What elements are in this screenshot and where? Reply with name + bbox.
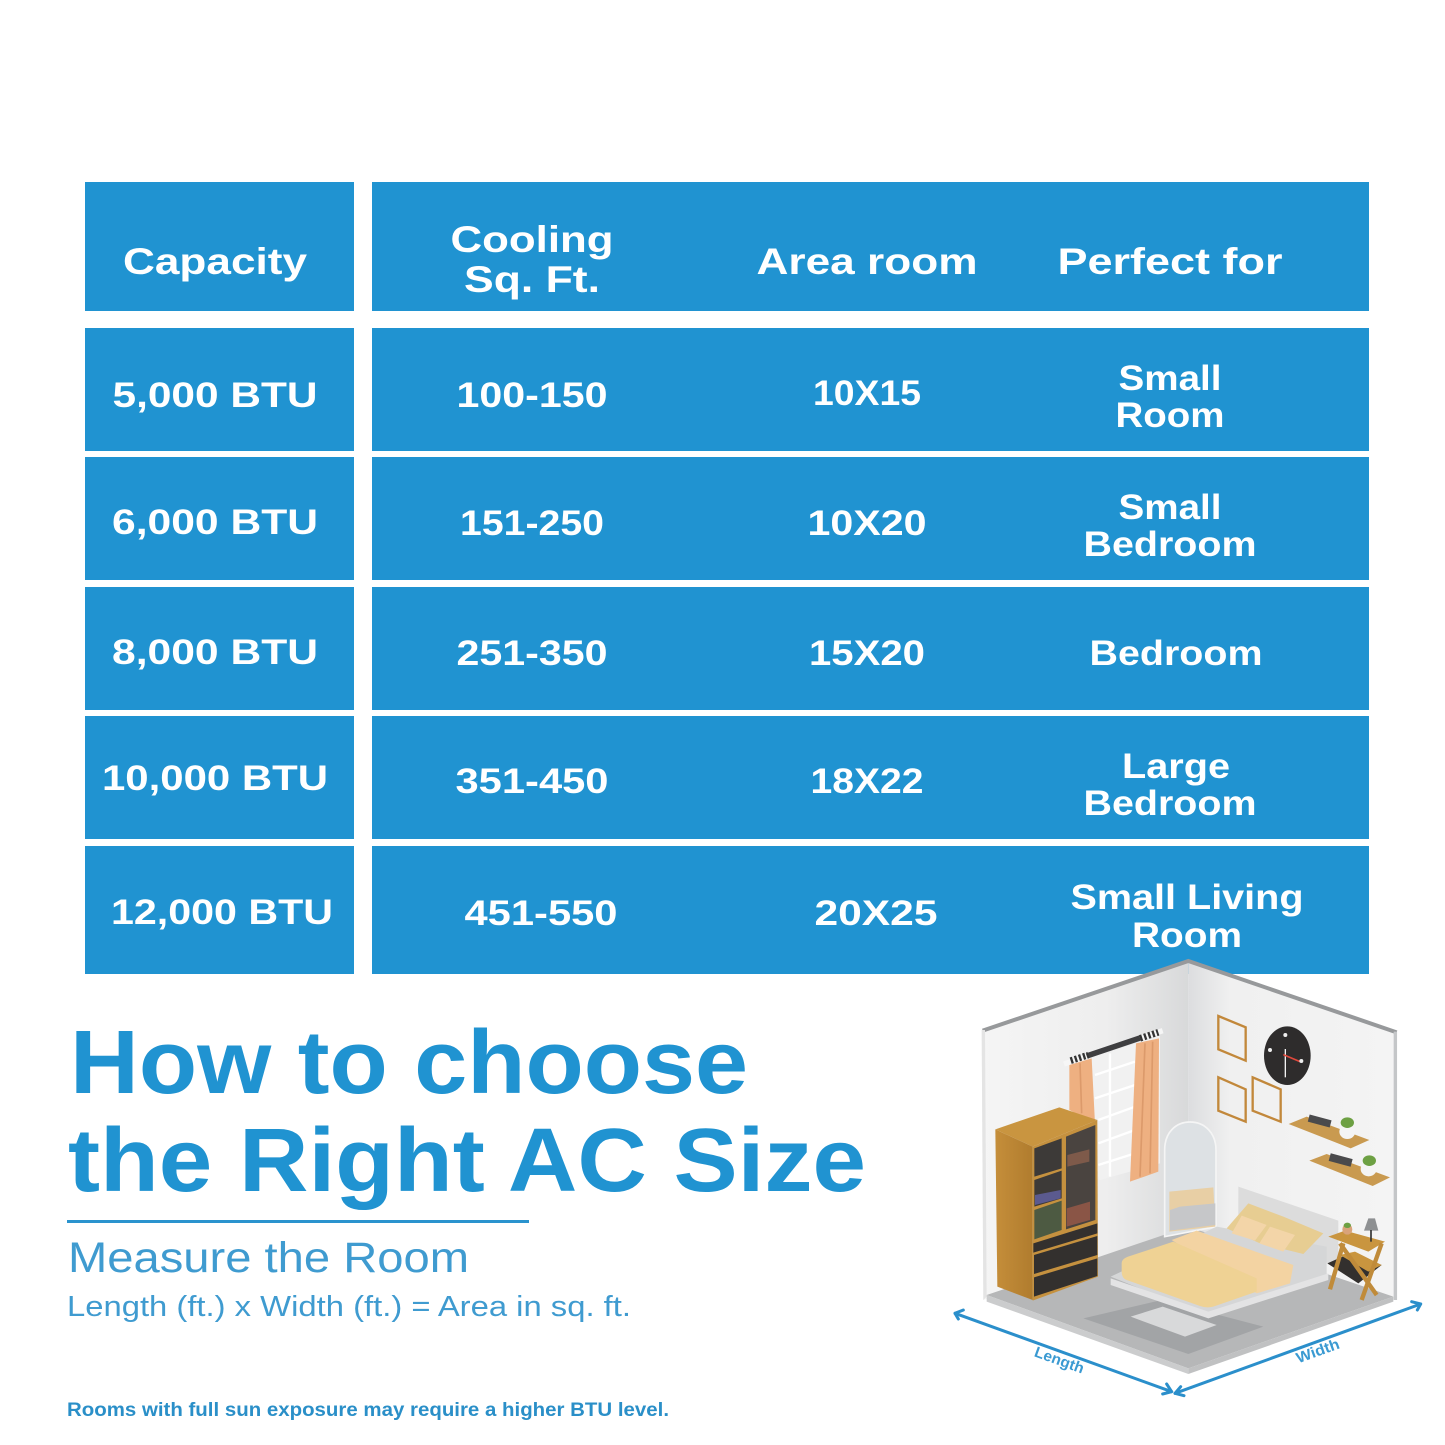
row: 6,000 BTU: 10X20 [808,504,926,543]
row: 10,000 BTU: Bedroom [1084,784,1256,823]
row: 8,000 BTU: Bedroom [1090,634,1262,673]
title [68,1013,866,1211]
row: 5,000 BTU: Small [1118,359,1222,398]
row: 12,000 BTU: Room [1132,916,1242,955]
table header: cooling, area room, perfect for: Cooling [450,219,614,260]
table header: capacity: Capacity [123,241,308,282]
row: 5,000 BTU: 100-150 [456,376,608,415]
table header: cooling, area room, perfect for [372,182,1369,311]
title: the Right AC Size [68,1111,866,1211]
row: 10,000 BTU [85,716,1369,839]
row: 8,000 BTU: 15X20 [809,634,925,673]
wardrobe [995,1107,1098,1301]
row: 12,000 BTU: 451-550 [464,894,618,933]
wall shelves [1289,1115,1390,1186]
subheading: measure the room: Measure the Room [68,1234,469,1282]
row: 12,000 BTU: 12,000 BTU [111,893,333,932]
row: 8,000 BTU: 8,000 BTU [112,633,318,672]
row: 5,000 BTU: Room [1116,396,1224,435]
row: 12,000 BTU: Small Living [1070,878,1304,917]
row: 5,000 BTU: 10X15 [813,374,921,413]
row: 6,000 BTU: Small [1118,488,1222,527]
row: 5,000 BTU: 5,000 BTU [112,376,318,415]
illustration: isometric bedroom [955,960,1421,1396]
title: How to choose [70,1013,748,1113]
row: 12,000 BTU [85,846,1369,974]
window and curtains [1064,1031,1163,1182]
row: 8,000 BTU: 251-350 [456,634,608,673]
row: 12,000 BTU: 20X25 [814,894,938,933]
length arrow [955,1310,1172,1394]
table header: capacity [85,182,354,311]
width arrow [1175,1302,1421,1396]
picture frames [1218,1016,1281,1122]
row: 10,000 BTU: 18X22 [810,762,924,801]
row: 6,000 BTU [85,457,1369,580]
floor [987,1227,1393,1374]
row: 8,000 BTU [85,587,1369,710]
length label: Length [1032,1344,1086,1377]
table header: cooling, area room, perfect for: Sq. Ft. [464,259,600,300]
row: 10,000 BTU: Large [1122,747,1230,786]
row: 6,000 BTU: Bedroom [1084,525,1256,564]
bed [1111,1187,1338,1318]
row: 10,000 BTU: 351-450 [456,762,608,801]
row: 6,000 BTU: 151-250 [460,504,604,543]
note: sun exposure: Rooms with full sun exposure may require a higher BTU level. [67,1400,669,1421]
formula: Length (ft.) x Width (ft.) = Area in sq. ft. [67,1291,631,1323]
table header: cooling, area room, perfect for: Perfect for [1058,241,1282,282]
mirror [1165,1122,1216,1237]
row: 5,000 BTU [85,328,1369,451]
width label: Width [1294,1336,1342,1367]
wall clock [1264,1026,1311,1085]
bedside table and lamp [1327,1218,1385,1300]
row: 6,000 BTU: 6,000 BTU [112,503,318,542]
row: 10,000 BTU: 10,000 BTU [102,759,328,798]
walls [982,960,1397,1300]
table header: cooling, area room, perfect for: Area room [756,241,978,282]
title underline [67,1220,529,1223]
